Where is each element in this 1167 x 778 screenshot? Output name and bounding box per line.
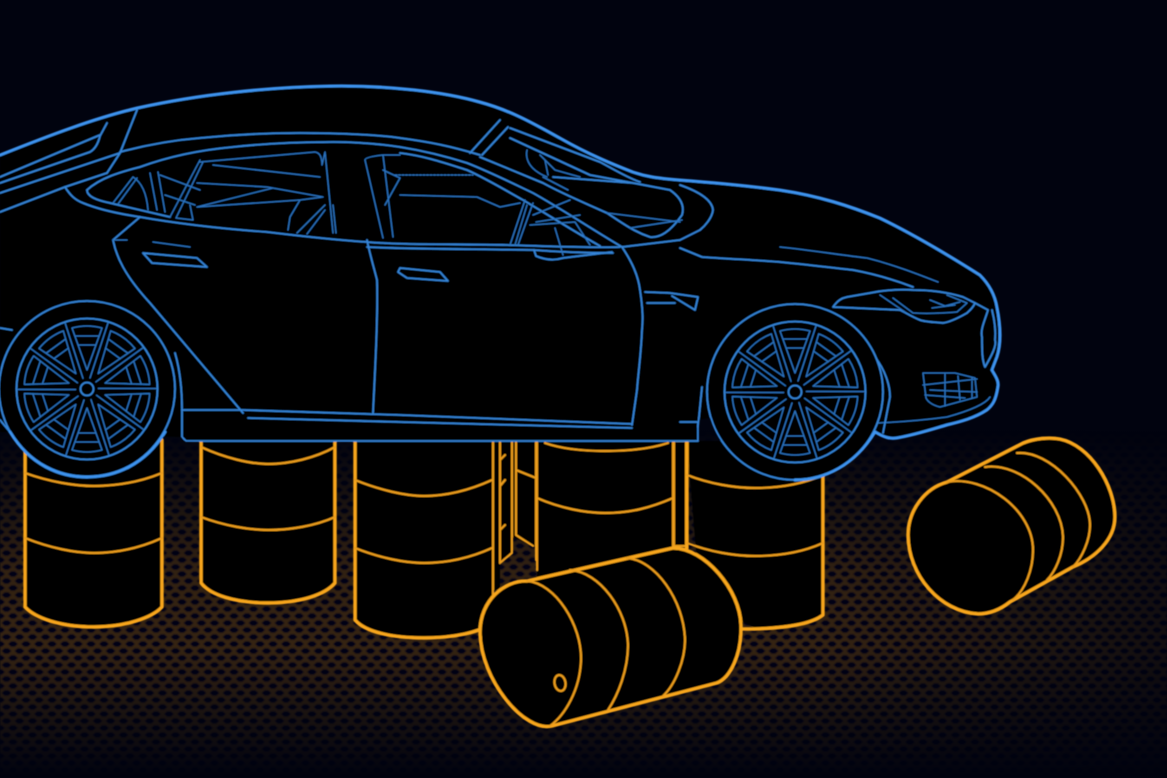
roof inner line (120, 133, 480, 155)
tyre bottom glow front (795, 432, 875, 480)
nose grille edge (975, 303, 995, 367)
lower bumper line (877, 397, 990, 423)
rear door outline (113, 217, 243, 413)
car (0, 86, 1000, 480)
ground lattice grid (0, 456, 1167, 755)
bung hole (553, 674, 567, 692)
barrel 1 (25, 430, 162, 627)
fallen barrel with bung hole (480, 548, 741, 727)
oil barrels standing under the car (25, 430, 823, 638)
front wheel arch (698, 357, 890, 433)
windshield (470, 120, 683, 237)
rear door handle (143, 253, 207, 267)
illustration (0, 86, 1115, 727)
front door handle (398, 268, 448, 281)
hood lines (622, 185, 913, 287)
barrel 4 (537, 441, 673, 590)
dotted window line (395, 174, 473, 176)
barrel 3 (355, 441, 493, 638)
door seam (367, 240, 377, 413)
rear window interior (113, 152, 336, 234)
side mirror (534, 250, 612, 260)
tyre bottom glow rear (10, 432, 165, 477)
window lower edge (65, 187, 620, 247)
rear wheel (0, 301, 175, 477)
rear wheel arch (0, 328, 182, 432)
barrel behind, narrow strips (493, 441, 687, 590)
sill bottom (182, 410, 698, 441)
rear deck lines (0, 110, 137, 212)
fallen barrel on the right (908, 438, 1115, 614)
side marker (645, 292, 698, 310)
sill lines (182, 410, 632, 428)
barrel 5 (687, 441, 823, 629)
front window interior (365, 155, 590, 255)
barrel 2 (201, 441, 335, 603)
lower bumper vents (923, 373, 977, 407)
front door edge (622, 247, 643, 425)
front wheel (707, 304, 883, 480)
headlight (833, 290, 975, 323)
window upper frame (87, 142, 622, 247)
car body silhouette (0, 86, 1000, 441)
roofline outline (0, 86, 1000, 438)
